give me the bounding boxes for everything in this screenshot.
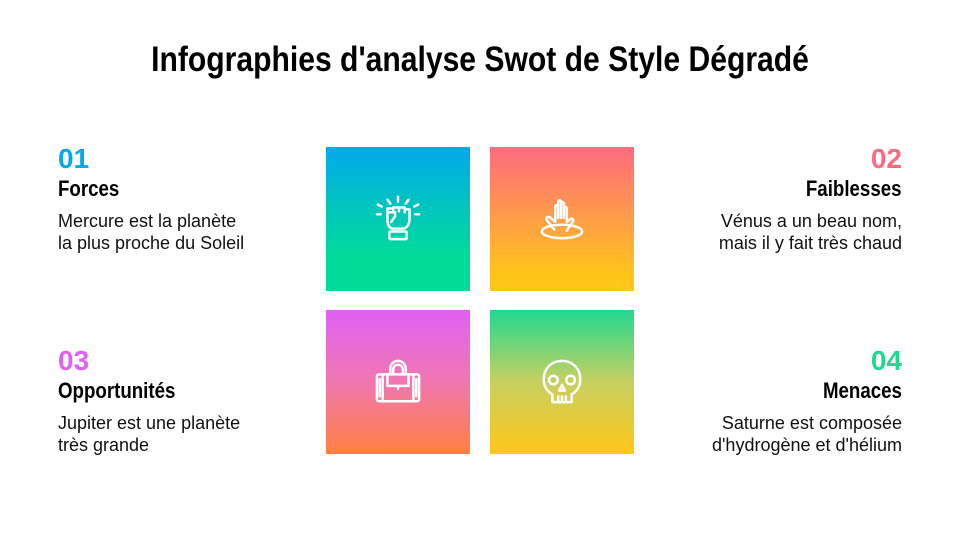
square: faiblesses bbox=[490, 147, 634, 291]
text: opportunites: très grande bbox=[58, 435, 149, 455]
text: faiblesses: 02 bbox=[871, 143, 902, 174]
icon: skull bbox=[542, 360, 582, 404]
text: forces bbox=[58, 143, 244, 253]
text: opportunites: 03 bbox=[58, 345, 89, 376]
text: menaces: d'hydrogène et d'hélium bbox=[712, 435, 902, 455]
text: opportunites bbox=[58, 345, 240, 455]
text: opportunites: Jupiter est une planète bbox=[58, 413, 240, 433]
text: faiblesses: Faiblesses bbox=[806, 176, 902, 201]
title: Infographies d'analyse Swot de Style Dégradé bbox=[151, 40, 809, 79]
text: forces: Forces bbox=[58, 176, 119, 201]
text: faiblesses bbox=[719, 143, 902, 253]
text: menaces: Menaces bbox=[823, 378, 902, 403]
text: forces: la plus proche du Soleil bbox=[58, 233, 244, 253]
icon: briefcase bbox=[376, 360, 420, 402]
text: faiblesses: Vénus a un beau nom, bbox=[721, 211, 902, 231]
square: opportunites bbox=[326, 310, 470, 454]
square: forces bbox=[326, 147, 470, 291]
text: faiblesses: mais il y fait très chaud bbox=[719, 233, 902, 253]
text: menaces: Saturne est composée bbox=[722, 413, 902, 433]
text: menaces: 04 bbox=[871, 345, 902, 376]
text: forces: 01 bbox=[58, 143, 89, 174]
text: forces: Mercure est la planète bbox=[58, 211, 236, 231]
icon: drowning hand bbox=[540, 199, 584, 240]
square: menaces bbox=[490, 310, 634, 454]
text: menaces bbox=[712, 345, 902, 455]
text: opportunites: Opportunités bbox=[58, 378, 175, 403]
icon: fist bbox=[376, 196, 420, 240]
